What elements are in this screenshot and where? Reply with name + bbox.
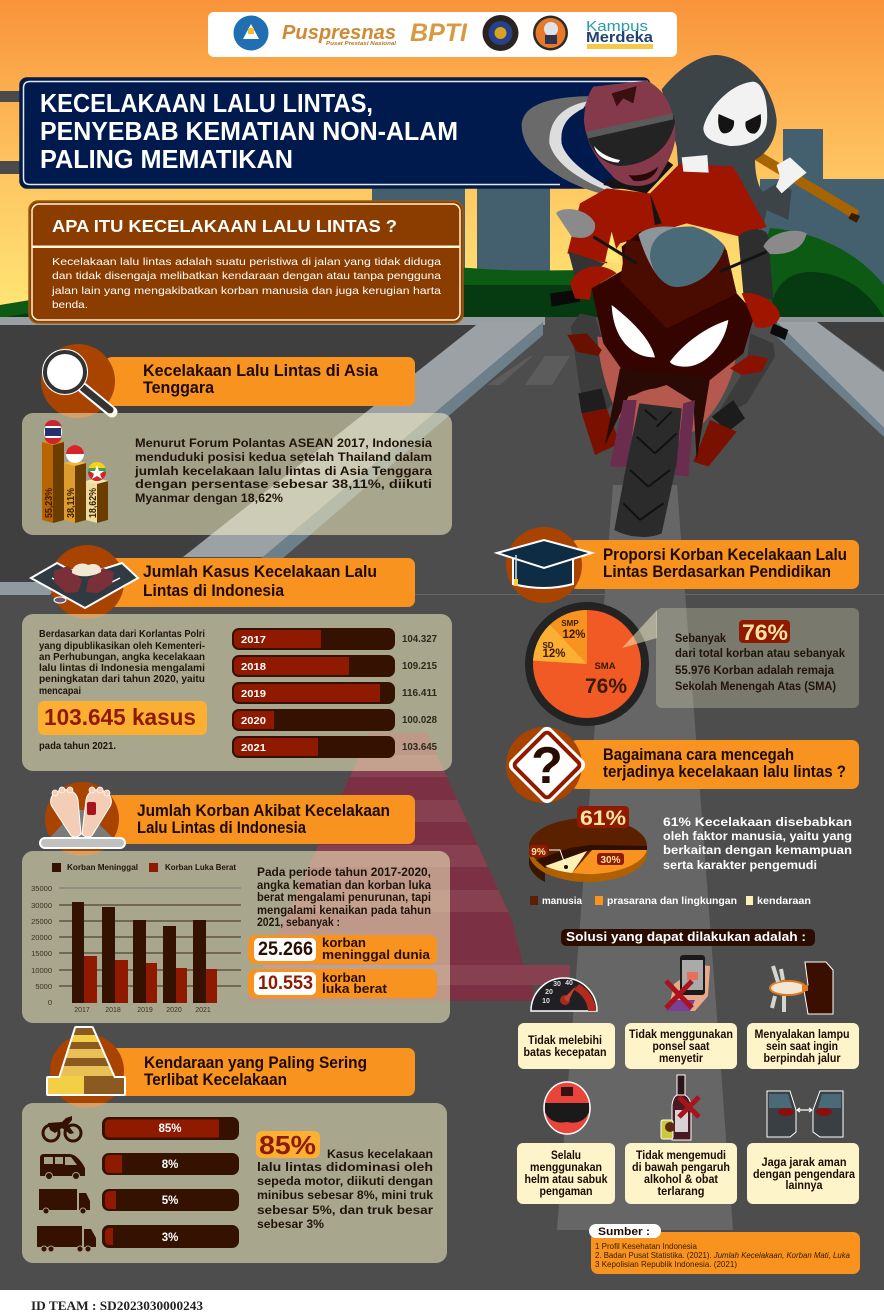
grouped bar chart: 2018 bbox=[105, 1007, 121, 1014]
bar chart: kasus per tahun bbox=[232, 628, 437, 758]
text block bbox=[39, 629, 205, 697]
bar chart: jenis kendaraan: 5% bbox=[162, 1195, 178, 1207]
text: faktor manusia bbox=[663, 817, 852, 872]
team id: ID TEAM : SD2023030000243 bbox=[31, 1299, 203, 1313]
panel: definition bbox=[29, 201, 463, 323]
definition body: jalan lain yang mengakibatkan korban manusia dan juga kerugian harta bbox=[51, 285, 441, 297]
text block: jumlah kecelakaan lalu lintas di Asia Tenggara bbox=[134, 466, 433, 478]
icon: circle backdrop and magnifier bbox=[41, 344, 115, 418]
text block: Berdasarkan data dari Korlantas Polri bbox=[39, 629, 205, 640]
logo: BPTI: BPTI bbox=[410, 19, 468, 47]
text block: dari total korban atau sebanyak bbox=[675, 648, 846, 660]
text block: 55.976 Korban adalah remaja bbox=[675, 665, 835, 677]
header: Jumlah Korban bbox=[40, 782, 415, 856]
stat: 10.553 bbox=[248, 969, 437, 998]
text block: minibus sebesar 8%, mini truk bbox=[257, 1190, 434, 1202]
definition body: benda. bbox=[52, 299, 88, 311]
pie chart: pendidikan: SMA bbox=[594, 661, 616, 672]
text block: Pada periode tahun 2017-2020, bbox=[257, 867, 431, 879]
grouped bar chart: 20000 bbox=[31, 933, 52, 942]
text block: an Perhubungan, angka kecelakaan bbox=[39, 652, 205, 663]
card text: signal: Menyalakan lampu bbox=[754, 1027, 850, 1041]
heading text: Lintas di Indonesia bbox=[143, 581, 284, 600]
stat: 10.553: luka berat bbox=[322, 981, 388, 996]
heading text: Bagaimana cara mencegah bbox=[603, 745, 794, 764]
illustration: reaper and motorcycle rider bbox=[522, 55, 860, 537]
card text: helmet: helm atau sabuk bbox=[524, 1172, 608, 1186]
sumber list: 3 Kepolisian Republik Indonesia. (2021) bbox=[595, 1260, 737, 1269]
icon: feet under sheet with toe tag bbox=[40, 782, 125, 856]
text block: Sekolah Menengah Atas (SMA) bbox=[675, 681, 836, 693]
text block: dengan persentase sebesar 38,11%, diikuti bbox=[135, 479, 432, 491]
icon: helmet bbox=[544, 1082, 590, 1134]
text block: menduduki posisi kedua setelah Thailand dalam bbox=[135, 452, 432, 464]
card text: alcohol bbox=[632, 1148, 730, 1198]
header: Kendaraan bbox=[40, 1025, 415, 1108]
motorcycle salmon panels bbox=[597, 337, 737, 442]
icon: warning question mark: ? bbox=[531, 737, 563, 795]
chart legend bbox=[52, 862, 236, 872]
logo: Puspresnas: Pusat Prestasi Nasional bbox=[326, 41, 397, 47]
grouped bar chart: 0 bbox=[48, 998, 52, 1007]
heading text: Jumlah Kasus Kecelakaan Lalu bbox=[143, 562, 377, 581]
text: faktor manusia: 61% Kecelakaan disebabkan bbox=[663, 817, 852, 829]
icon: two cars keeping distance bbox=[767, 1091, 843, 1137]
card text: phone: menyetir bbox=[659, 1051, 703, 1065]
icon: speedometer: 20 bbox=[545, 989, 553, 996]
header: Proporsi Korban bbox=[497, 527, 859, 603]
bar chart: kasus per tahun: 2021 bbox=[241, 742, 266, 754]
chart: 3D bars with flags: 55,23% bbox=[44, 488, 55, 518]
panel: sumber bbox=[589, 1224, 860, 1274]
pie chart: pendidikan: 12% bbox=[542, 648, 566, 660]
callout: 85%: 85% bbox=[259, 1130, 316, 1160]
logo: Kampus Merdeka bbox=[586, 18, 654, 49]
card text: distance: dengan pengendara bbox=[753, 1167, 855, 1181]
grouped bar chart: 2021 bbox=[195, 1007, 211, 1014]
icon: mini truck bbox=[39, 1189, 90, 1214]
heading text: Kecelakaan Lalu Lintas di Asia bbox=[143, 361, 379, 380]
icon: phone with red cross bbox=[665, 955, 710, 1011]
icon: turn signal on vehicle bbox=[770, 962, 833, 1014]
handlebars and gloves bbox=[550, 289, 580, 307]
card text: phone: Tidak menggunakan bbox=[629, 1027, 733, 1041]
icon: traffic cone bbox=[46, 1026, 126, 1108]
stat: 10.553: korban bbox=[322, 970, 366, 985]
bar chart: kasus per tahun: 116.411 bbox=[402, 688, 437, 699]
text block: sebesar 3% bbox=[257, 1219, 324, 1231]
grouped bar chart bbox=[31, 862, 241, 1014]
chart: 3D bars with flags: 18,62% bbox=[88, 488, 99, 518]
text block bbox=[257, 867, 432, 929]
stat: 25.266: meninggal dunia bbox=[322, 947, 431, 962]
sumber list bbox=[595, 1242, 851, 1269]
windshield bbox=[638, 226, 725, 287]
rider jacket bbox=[567, 163, 767, 263]
card text: phone: ponsel saat bbox=[652, 1039, 710, 1053]
text line: pada tahun 2021. bbox=[39, 741, 116, 752]
heading text: Tenggara bbox=[143, 378, 215, 397]
icon: Myanmar flag bbox=[88, 462, 106, 481]
legend: faktor bbox=[530, 896, 811, 907]
grouped bar chart: 15000 bbox=[31, 949, 52, 958]
solution heading: Solusi yang dapat dilakukan adalah : bbox=[566, 930, 806, 944]
heading text bbox=[137, 801, 390, 837]
bar chart: kasus per tahun: 2019 bbox=[241, 688, 266, 700]
skull bbox=[703, 82, 767, 146]
text block: lalu lintas didominasi oleh bbox=[257, 1162, 433, 1174]
bar chart: kasus per tahun: 100.028 bbox=[402, 715, 437, 726]
sumber list: 1 Profil Kesehatan Indonesia bbox=[595, 1242, 698, 1251]
reaper cloak bbox=[662, 55, 792, 227]
panel: Jumlah Korban bbox=[22, 851, 450, 1023]
3D pie chart: faktor bbox=[529, 806, 647, 882]
bar chart: kasus per tahun: 103.645 bbox=[402, 742, 437, 753]
heading text bbox=[603, 745, 846, 781]
logo: mascot bbox=[533, 16, 568, 50]
grouped bar chart: 5000 bbox=[35, 982, 52, 991]
bar chart: jenis kendaraan: 8% bbox=[162, 1159, 178, 1171]
heading text: Lintas Berdasarkan Pendidikan bbox=[603, 562, 831, 581]
grouped bar chart: 35000 bbox=[31, 884, 52, 893]
title text: PENYEBAB KEMATIAN NON-ALAM bbox=[40, 116, 458, 146]
stat: 25.266 bbox=[248, 935, 437, 964]
text block bbox=[257, 1149, 434, 1231]
card text: helmet: menggunakan bbox=[530, 1160, 602, 1174]
chart legend: Korban Meninggal bbox=[67, 862, 138, 872]
definition body: Kecelakaan lalu lintas adalah suatu peristiwa di jalan yang tidak diduga bbox=[52, 256, 441, 268]
sumber tab: Sumber : bbox=[598, 1226, 650, 1238]
rider legs bbox=[571, 313, 620, 423]
badge: 61%: 61% bbox=[580, 807, 626, 830]
chart legend: Korban Luka Berat bbox=[165, 862, 236, 872]
badge: 76%: 76% bbox=[742, 620, 788, 645]
card text: alcohol: di bawah pengaruh bbox=[632, 1160, 730, 1174]
scythe handle bbox=[753, 153, 857, 215]
text block: 2021, sebanyak : bbox=[257, 917, 340, 929]
bar chart: jenis kendaraan: 85% bbox=[158, 1123, 182, 1135]
card text: speed bbox=[524, 1033, 606, 1059]
icon: motorcycle bbox=[43, 1116, 81, 1141]
pie chart: pendidikan bbox=[525, 602, 649, 726]
rider arms bbox=[568, 252, 605, 277]
bar chart: kasus per tahun: 109.215 bbox=[402, 661, 437, 672]
icon: speedometer bbox=[531, 978, 597, 1011]
mirrors bbox=[556, 209, 595, 238]
title text: KECELAKAAN LALU LINTAS, bbox=[40, 88, 373, 118]
card text: helmet: pengaman bbox=[540, 1184, 592, 1198]
text block: lalu lintas di Indonesia mengalami bbox=[39, 663, 205, 674]
icon: speedometer: 10 bbox=[542, 998, 550, 1005]
logo: Puspresnas: Puspresnas bbox=[282, 22, 396, 44]
card text: signal: berpindah jalur bbox=[764, 1051, 841, 1065]
legend: faktor: kendaraan bbox=[757, 896, 811, 907]
grouped bar chart: 2020 bbox=[166, 1007, 182, 1014]
text block: sebesar 5%, dan truk besar bbox=[257, 1205, 434, 1217]
rider helmet bbox=[584, 81, 675, 186]
text block: mencapai bbox=[39, 686, 81, 697]
header: Bagaimana cara mencegah bbox=[506, 724, 859, 806]
text block: angka kematian dan korban luka bbox=[257, 880, 432, 892]
turn signals bbox=[567, 333, 602, 356]
icon: large truck bbox=[37, 1226, 96, 1252]
logo: Kampus Merdeka: Merdeka bbox=[586, 29, 654, 46]
text block bbox=[675, 648, 846, 693]
icon: Indonesia flag bbox=[66, 445, 84, 463]
legend: faktor: prasarana dan lingkungan bbox=[607, 896, 737, 907]
icon: graduation cap bbox=[497, 527, 592, 603]
heading text: Proporsi Korban Kecelakaan Lalu bbox=[603, 545, 847, 564]
text block: Myanmar dengan 18,62% bbox=[135, 493, 283, 505]
grouped bar chart: 10000 bbox=[31, 966, 52, 975]
bar chart: kasus per tahun: 2020 bbox=[241, 715, 266, 727]
panel: Jumlah Kasus bbox=[22, 614, 452, 771]
grouped bar chart: 2019 bbox=[137, 1007, 153, 1014]
grouped bar chart: 30000 bbox=[31, 901, 52, 910]
card text: speed: batas kecepatan bbox=[524, 1045, 606, 1059]
heading text: Kendaraan yang Paling Sering bbox=[144, 1053, 367, 1072]
title text: PALING MEMATIKAN bbox=[40, 144, 293, 174]
text block: berat mengalami penurunan, tapi bbox=[257, 892, 431, 904]
text block: yang dipublikasikan oleh Kementeri- bbox=[39, 641, 205, 652]
definition heading: APA ITU KECELAKAAN LALU LINTAS ? bbox=[52, 216, 397, 236]
card text: distance bbox=[753, 1155, 855, 1192]
bar chart: kasus per tahun: 2018 bbox=[241, 661, 266, 673]
badge: 30%: 30% bbox=[600, 855, 621, 866]
heading text: terjadinya kecelakaan lalu lintas ? bbox=[603, 762, 846, 781]
card text: helmet bbox=[524, 1148, 608, 1198]
text block: sepeda motor, diikuti dengan bbox=[257, 1176, 433, 1188]
front struts bbox=[605, 368, 710, 460]
pie chart: pendidikan: 12% bbox=[562, 629, 586, 641]
legend: faktor: manusia bbox=[542, 896, 582, 907]
definition body bbox=[51, 256, 441, 311]
panel: callout pendidikan bbox=[622, 608, 859, 708]
icon: car collision on crossroad bbox=[31, 545, 138, 619]
headlights bbox=[612, 305, 655, 357]
panel: Asia Tenggara bbox=[22, 413, 452, 535]
card text: alcohol: Tidak mengemudi bbox=[636, 1148, 726, 1162]
bar chart: jenis kendaraan bbox=[102, 1117, 239, 1248]
text: faktor manusia: berkaitan dengan kemampuan bbox=[663, 845, 852, 857]
scythe blade bbox=[522, 96, 637, 199]
grouped bar chart: 2017 bbox=[74, 1007, 90, 1014]
chart: 3D bars with flags bbox=[42, 420, 108, 523]
card text: signal bbox=[754, 1027, 850, 1065]
sumber tab bbox=[589, 1224, 661, 1238]
icon: Thailand flag bbox=[44, 420, 62, 444]
logo: Kampus Merdeka: Kampus bbox=[586, 18, 648, 35]
card text: alcohol: alkohol & obat bbox=[644, 1172, 718, 1186]
logo: Tut Wuri bbox=[234, 16, 268, 50]
pie chart: pendidikan: 76% bbox=[585, 675, 627, 698]
stat: 10.553: 10.553 bbox=[258, 973, 313, 994]
text block: Kasus kecelakaan bbox=[327, 1149, 433, 1161]
sumber list: 2. Badan Pusat Statistika. (2021). Jumlah Kecelakaan, Korban Mati, Luka bbox=[595, 1251, 851, 1260]
card text: speed: Tidak melebihi bbox=[528, 1033, 602, 1047]
heading text: Jumlah Korban Akibat Kecelakaan bbox=[137, 801, 390, 820]
header: Jumlah Kasus bbox=[31, 545, 415, 619]
text block: peningkatan dari tahun 2020, yaitu bbox=[39, 674, 205, 685]
icon: bottle with red cross bbox=[661, 1075, 699, 1140]
card text: alcohol: terlarang bbox=[658, 1184, 704, 1198]
text: faktor manusia: oleh faktor manusia, yaitu yang bbox=[663, 831, 852, 843]
definition body: dan tidak disengaja melibatkan kendaraan dengan atau tanpa pengguna bbox=[52, 270, 441, 282]
panel: Kendaraan bbox=[22, 1103, 447, 1263]
stat: 25.266: 25.266 bbox=[258, 939, 313, 960]
title panel bbox=[20, 78, 650, 188]
bar chart: jenis kendaraan: 3% bbox=[162, 1232, 178, 1244]
title text bbox=[40, 88, 458, 174]
heading text: Terlibat Kecelakaan bbox=[144, 1070, 287, 1089]
skeleton hand bbox=[776, 157, 807, 193]
logo: university emblem bbox=[482, 15, 518, 51]
pie chart: pendidikan: SMP bbox=[561, 619, 579, 628]
card text: phone bbox=[629, 1027, 733, 1065]
logo bar bbox=[208, 12, 677, 57]
header: Asia Tenggara bbox=[41, 344, 415, 418]
card text: distance: Jaga jarak aman bbox=[762, 1155, 846, 1169]
solution cards bbox=[517, 1023, 859, 1204]
heading text: Lalu Lintas di Indonesia bbox=[137, 818, 306, 837]
icon: warning question mark bbox=[506, 724, 588, 806]
card text: signal: sein saat ingin bbox=[766, 1039, 838, 1053]
badge: 9% with leader line: 9% bbox=[531, 847, 546, 858]
motorcycle fairing bbox=[592, 232, 755, 380]
chart: 3D bars with flags: 38,11% bbox=[66, 488, 77, 518]
card text: distance: lainnya bbox=[786, 1178, 823, 1192]
icon: minibus bbox=[40, 1154, 85, 1180]
text: faktor manusia: serta karakter pengemudi bbox=[663, 860, 817, 872]
bar chart: kasus per tahun: 104.327 bbox=[402, 634, 437, 645]
card text: helmet: Selalu bbox=[551, 1148, 581, 1162]
text block bbox=[134, 438, 433, 505]
icon: speedometer: 30 bbox=[553, 981, 561, 988]
grouped bar chart: 25000 bbox=[31, 917, 52, 926]
heading text bbox=[144, 1053, 367, 1089]
heading text bbox=[143, 361, 379, 397]
pie chart: pendidikan: SD bbox=[542, 641, 554, 650]
text block: Menurut Forum Polantas ASEAN 2017, Indonesia bbox=[135, 438, 433, 450]
text label: Sebanyak bbox=[675, 633, 727, 645]
heading text bbox=[143, 562, 377, 600]
heading text bbox=[603, 545, 847, 581]
text block: mengalami kenaikan pada tahun bbox=[257, 905, 431, 917]
bar chart: kasus per tahun: 2017 bbox=[241, 634, 266, 646]
front tire bbox=[614, 403, 682, 537]
stat: 25.266: korban bbox=[322, 935, 366, 950]
icon: speedometer: 40 bbox=[565, 980, 573, 987]
callout: 103.645 kasus: 103.645 kasus bbox=[44, 704, 196, 730]
